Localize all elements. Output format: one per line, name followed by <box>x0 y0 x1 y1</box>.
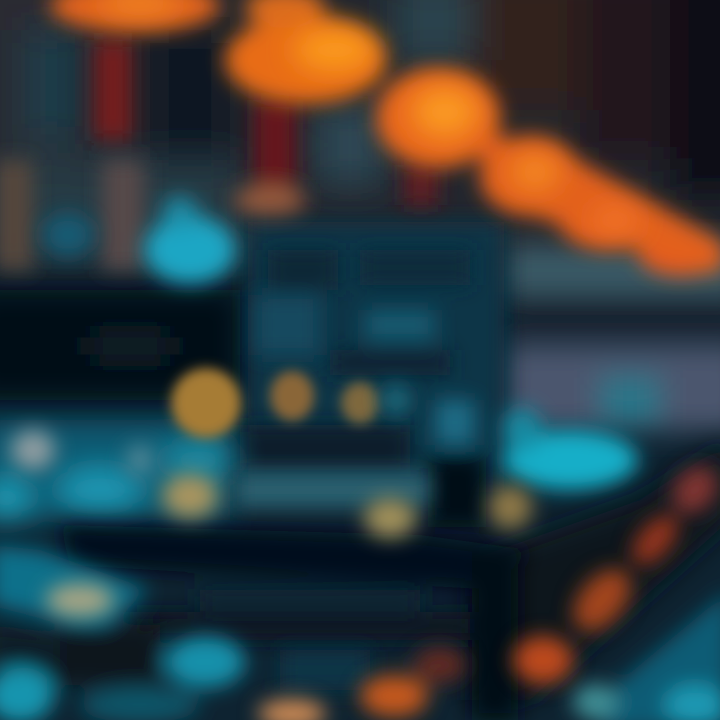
glowing lights: lower right embers <box>258 457 720 720</box>
chimney stems <box>0 40 438 270</box>
panel: lower deck band <box>60 472 530 720</box>
coins: gold circles <box>11 368 532 617</box>
panel: right lower dark wedge <box>470 440 720 700</box>
panel: bottom right teal <box>573 590 720 720</box>
cyan pool <box>502 408 638 490</box>
panel: lower left teal field <box>0 420 238 522</box>
panel: right grey horizon <box>505 245 720 430</box>
panel: central machine block <box>240 222 504 527</box>
panel: bottom left teal <box>0 545 370 720</box>
flames: orange glow along the roofline <box>50 0 720 276</box>
teal tank <box>42 196 236 284</box>
panel: left dark band <box>0 290 240 400</box>
background: upper wall <box>0 0 720 270</box>
